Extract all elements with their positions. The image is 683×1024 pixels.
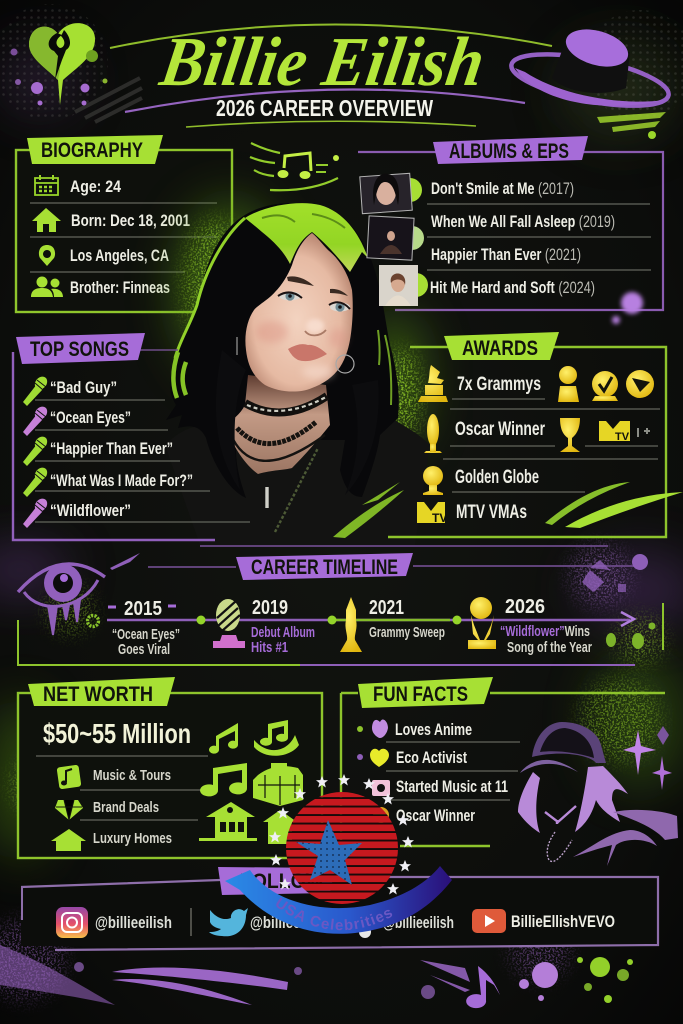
neck and chest bbox=[225, 375, 330, 474]
green spray glow bbox=[175, 200, 425, 450]
event: 2021: Grammy Sweep bbox=[369, 624, 445, 641]
paint splats bbox=[110, 553, 656, 649]
song list: “Wildflower” bbox=[50, 501, 131, 520]
song list bbox=[23, 374, 250, 528]
section: career timeline bbox=[18, 546, 663, 665]
icon: gear bbox=[88, 616, 98, 626]
watermark: USA Celebrities bbox=[225, 774, 452, 934]
ribbon banner bbox=[225, 866, 452, 934]
row: luxury homes: Luxury Homes bbox=[93, 830, 172, 847]
event: 2015 bbox=[108, 598, 180, 658]
row: brother bbox=[31, 276, 170, 297]
icon: large house bbox=[206, 802, 255, 838]
row: age bbox=[35, 175, 121, 196]
green slashes bbox=[333, 482, 683, 538]
row: grammys bbox=[418, 365, 660, 409]
black hair bbox=[166, 203, 399, 498]
row: born bbox=[32, 208, 190, 232]
icon: music note on disc bbox=[260, 720, 288, 746]
nose bbox=[305, 319, 326, 335]
face bbox=[245, 233, 353, 392]
panel: social media bbox=[21, 867, 658, 950]
trophy and MTV badges bbox=[560, 418, 580, 452]
event: 2019 bbox=[213, 597, 315, 656]
fact list bbox=[357, 720, 520, 825]
decoration: broken heart with drip bbox=[10, 23, 108, 105]
icon: dripping eye bbox=[18, 564, 105, 635]
fact list: Oscar Winner bbox=[396, 806, 475, 825]
heading: fun facts bbox=[358, 677, 493, 708]
green hair crown bbox=[245, 203, 368, 272]
necklaces bbox=[228, 396, 327, 532]
row: MTV VMAs: TV bbox=[432, 511, 447, 525]
subtitle: 2026 CAREER OVERVIEW bbox=[216, 95, 433, 121]
heading: career timeline bbox=[236, 553, 413, 580]
row: luxury homes bbox=[51, 829, 172, 851]
heading: albums and EPs: ALBUMS & EPS bbox=[449, 140, 569, 163]
hair bbox=[575, 766, 628, 832]
event: 2021 bbox=[340, 597, 445, 652]
album list: Happier Than Ever (2021) bbox=[431, 245, 581, 264]
earrings bbox=[237, 337, 354, 373]
body bbox=[165, 415, 430, 545]
heading: fun facts: FUN FACTS bbox=[373, 683, 468, 706]
event: 2026 bbox=[468, 596, 592, 656]
sparkles bbox=[623, 730, 656, 775]
row: oscar: Oscar Winner bbox=[455, 419, 545, 440]
icon: music note swoosh bbox=[250, 143, 339, 190]
row: born: Born: Dec 18, 2001 bbox=[71, 211, 190, 230]
panel: awards bbox=[333, 332, 683, 538]
panel: fun facts bbox=[341, 677, 678, 866]
panel: net worth bbox=[18, 677, 322, 858]
panel: albums and EPs bbox=[358, 136, 663, 324]
heading: follow: FOLLOW bbox=[240, 870, 324, 893]
event: 2015: Goes Viral bbox=[118, 641, 170, 658]
name: Billie Eilish bbox=[155, 23, 490, 101]
heading: net worth: NET WORTH bbox=[43, 683, 153, 706]
decoration: purple hat bbox=[507, 23, 673, 139]
fact list: Loves Anime bbox=[395, 720, 472, 739]
heading: awards bbox=[444, 332, 559, 360]
front hair locks bbox=[216, 350, 379, 495]
album list: Hit Me Hard and Soft (2024) bbox=[430, 278, 595, 297]
row: MTV VMAs: MTV VMAs bbox=[456, 502, 527, 523]
cap bbox=[532, 722, 606, 763]
panel: top songs bbox=[13, 333, 250, 540]
twitter handle bbox=[209, 908, 327, 936]
fact list: Eco Activist bbox=[396, 748, 467, 767]
tiktok handle: @billieeilish bbox=[383, 913, 454, 932]
decoration: bottom music note and splats bbox=[74, 957, 633, 1008]
song list: “Happier Than Ever” bbox=[50, 439, 173, 458]
cheek shading bbox=[256, 321, 347, 379]
ribbon text: USA Celebrities bbox=[276, 897, 392, 930]
youtube handle bbox=[472, 909, 615, 933]
heading: albums and EPs bbox=[433, 136, 588, 164]
event: 2026: “Wildflower”Wins bbox=[500, 623, 590, 640]
heading: awards: AWARDS bbox=[462, 337, 538, 360]
event: 2019: 2019 bbox=[252, 597, 288, 619]
chain bbox=[547, 832, 572, 861]
tiktok handle bbox=[359, 913, 454, 938]
icon: music note bbox=[209, 723, 238, 754]
event: 2021: 2021 bbox=[369, 597, 404, 619]
hair highlights bbox=[175, 218, 245, 358]
title bbox=[110, 23, 552, 127]
heading: top songs bbox=[16, 333, 145, 364]
fact list: Started Music at 11 bbox=[396, 777, 508, 796]
panel: biography bbox=[16, 135, 232, 312]
row: grammys: 7x Grammys bbox=[457, 374, 541, 395]
album list: When We All Fall Asleep (2019) bbox=[431, 212, 615, 231]
row: brother: Brother: Finneas bbox=[70, 278, 170, 297]
instagram handle bbox=[56, 907, 172, 938]
row: oscar bbox=[424, 414, 658, 459]
net worth value: $50~55 Million bbox=[43, 718, 191, 749]
song list: “Bad Guy” bbox=[50, 378, 117, 397]
twitter handle: @billieeilish bbox=[250, 913, 327, 932]
event: 2015: 2015 bbox=[124, 598, 162, 620]
song list: “Ocean Eyes” bbox=[50, 408, 131, 427]
icon: large music note bbox=[200, 763, 247, 796]
icon: small house bbox=[263, 810, 297, 844]
youtube handle: BillieEllishVEVO bbox=[511, 912, 615, 931]
heading: career timeline: CAREER TIMELINE bbox=[251, 556, 398, 579]
event: 2026: 2026 bbox=[505, 596, 545, 618]
icons: money sources bbox=[199, 720, 303, 844]
icon: suitcase bbox=[253, 766, 303, 806]
heading: net worth bbox=[28, 677, 175, 706]
heading: top songs: TOP SONGS bbox=[30, 338, 129, 361]
instagram handle: @billieeilish bbox=[95, 913, 172, 932]
row: MTV VMAs bbox=[417, 502, 527, 525]
heading: biography: BIOGRAPHY bbox=[41, 139, 143, 162]
song list: “What Was I Made For?” bbox=[50, 471, 193, 490]
event: 2019: Debut Album bbox=[251, 624, 315, 641]
decoration: bottom purple brush strokes bbox=[0, 945, 470, 1005]
row: golden globe: Golden Globe bbox=[455, 467, 539, 488]
row: brand deals: Brand Deals bbox=[93, 799, 159, 816]
lips bbox=[288, 344, 327, 361]
timeline line bbox=[107, 612, 634, 626]
row: age: Age: 24 bbox=[70, 177, 121, 196]
silhouette with cap bbox=[518, 722, 678, 866]
portrait of Billie Eilish bbox=[165, 200, 430, 545]
row: location bbox=[39, 245, 169, 266]
row: music and tours: Music & Tours bbox=[93, 767, 171, 784]
event: 2019: Hits #1 bbox=[251, 639, 288, 656]
row: golden globe bbox=[423, 466, 585, 495]
album list: Don't Smile at Me (2017) bbox=[431, 179, 574, 198]
row: brand deals bbox=[55, 799, 198, 820]
heading: biography bbox=[27, 135, 163, 164]
album list bbox=[427, 179, 651, 297]
row: location: Los Angeles, CA bbox=[70, 246, 169, 265]
paint splat bbox=[612, 292, 643, 324]
blue star bbox=[296, 820, 362, 885]
row: music and tours bbox=[57, 765, 202, 790]
heading: follow bbox=[218, 867, 335, 895]
eyes and brows bbox=[278, 276, 350, 312]
ring of stars bbox=[269, 774, 414, 894]
arms bbox=[613, 810, 678, 840]
event: 2015: “Ocean Eyes” bbox=[112, 626, 180, 643]
album covers bbox=[360, 173, 428, 306]
award badges bbox=[558, 366, 654, 402]
row: oscar: TV bbox=[615, 431, 630, 443]
event: 2026: Song of the Year bbox=[507, 639, 592, 656]
